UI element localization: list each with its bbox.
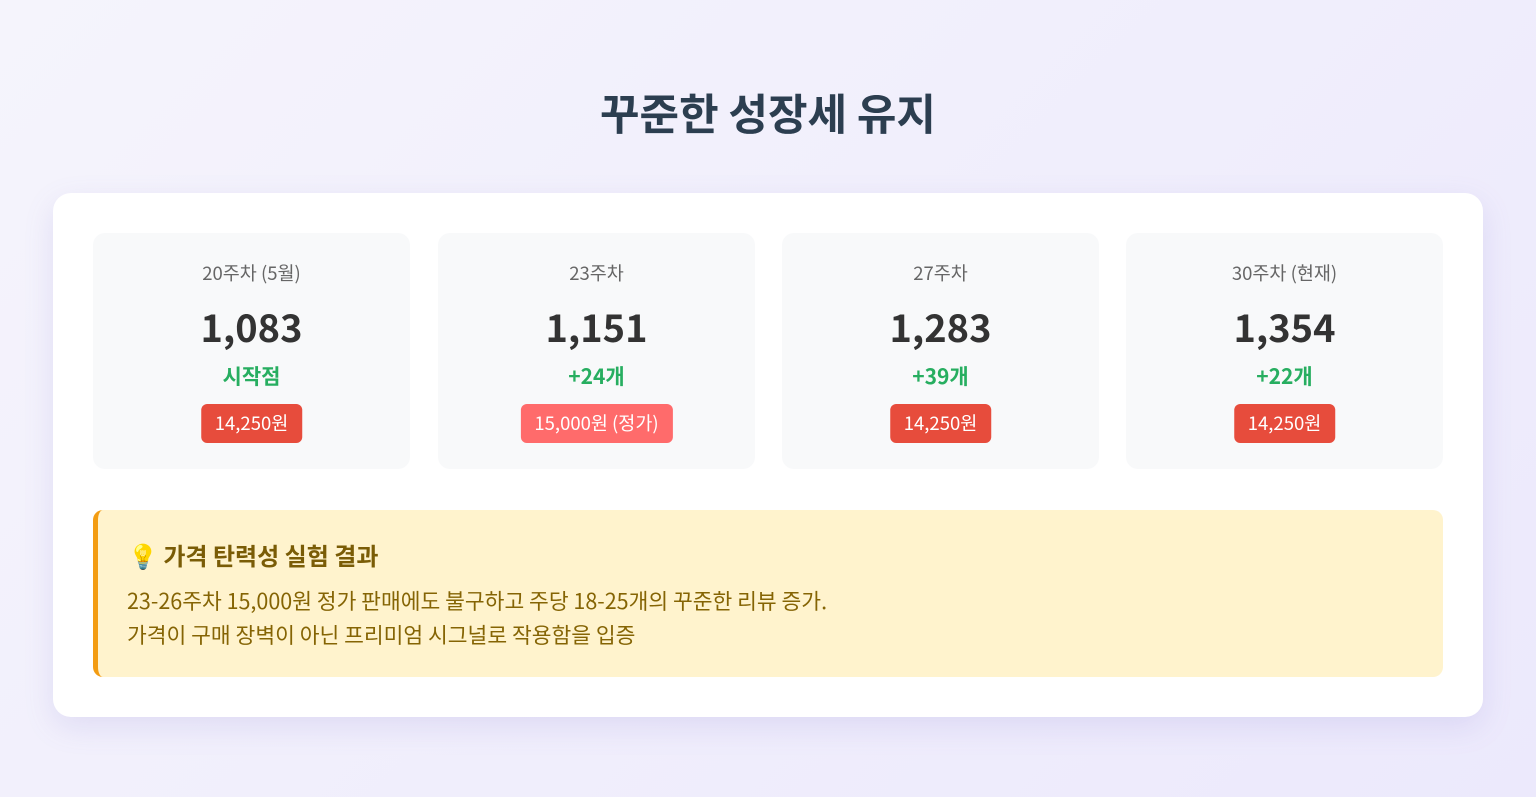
stat card: week 30 bbox=[1126, 233, 1443, 469]
callout text bbox=[127, 585, 827, 650]
stat card: week 23: 1,151 bbox=[545, 298, 648, 353]
stat card: week 27 bbox=[782, 233, 1099, 469]
stat card: week 30: +22개 bbox=[1256, 361, 1313, 391]
stat card: week 20: 1,083 bbox=[200, 298, 303, 353]
stat card: week 20: 20주차 (5월) bbox=[202, 260, 301, 286]
stat card: week 30: 30주차 (현재) bbox=[1232, 260, 1337, 286]
stat card: week 27: 14,250원 bbox=[904, 410, 977, 436]
stat card: week 23: +24개 bbox=[568, 361, 625, 391]
stat card: week 27: +39개 bbox=[912, 361, 969, 391]
stat card: week 30: 14,250원 bbox=[1248, 410, 1321, 436]
stat card: week 30: 1,354 bbox=[1233, 298, 1336, 353]
title: 꾸준한 성장세 유지 bbox=[600, 81, 936, 143]
stat card: week 27: 27주차 bbox=[913, 260, 968, 286]
stat card: week 23: 15,000원 (정가) bbox=[534, 410, 659, 436]
callout: price elasticity bbox=[93, 510, 1443, 677]
callout text: 가격이 구매 장벽이 아닌 프리미엄 시그널로 작용함을 입증 bbox=[127, 619, 635, 650]
stat card: week 20 bbox=[93, 233, 410, 469]
stat card: week 23 bbox=[438, 233, 755, 469]
callout heading: 💡 가격 탄력성 실험 결과 bbox=[128, 537, 378, 572]
stat card: week 20: 14,250원 bbox=[215, 410, 288, 436]
stat card: week 23: 23주차 bbox=[569, 260, 624, 286]
stat card: week 27: 1,283 bbox=[889, 298, 992, 353]
panel: main card bbox=[53, 193, 1483, 717]
stat card: week 20: 시작점 bbox=[223, 361, 280, 391]
callout text: 23-26주차 15,000원 정가 판매에도 불구하고 주당 18-25개의 꾸준한 리뷰 증가. bbox=[127, 585, 827, 616]
